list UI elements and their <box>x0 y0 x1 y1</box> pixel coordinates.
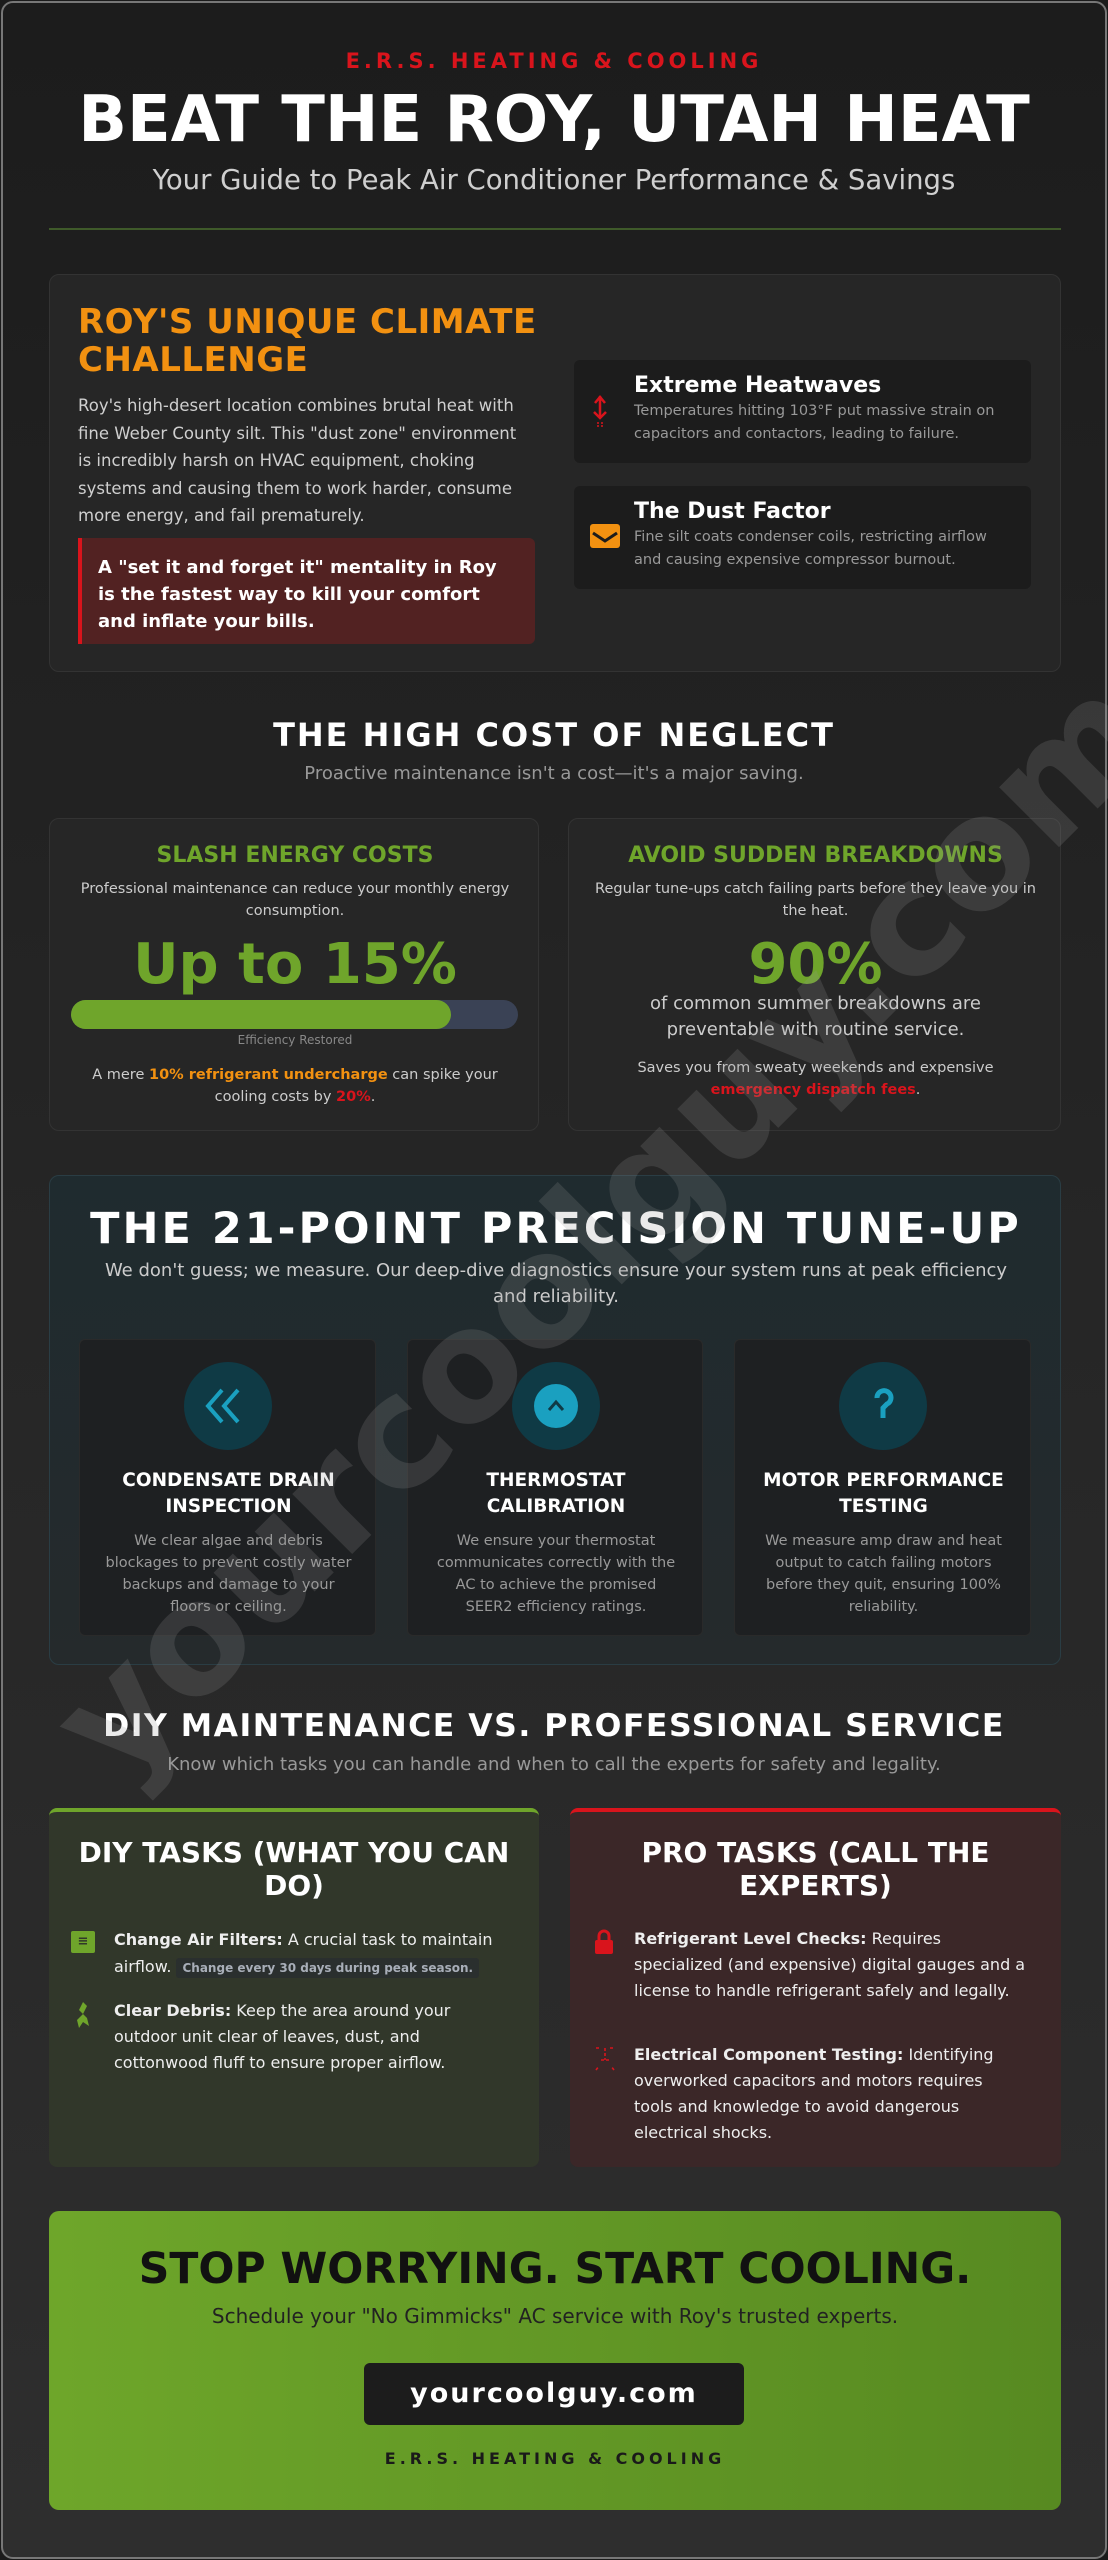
cta subtitle: Schedule your "No Gimmicks" AC service with Roy's trusted experts. <box>212 2304 898 2328</box>
pro item: electrical: Electrical Component Testing: Identifying overworked capacitors and motors requires tools and knowledge to avoid dangerous electrical shocks. <box>634 2045 994 2142</box>
icon: gauge <box>512 1362 600 1450</box>
brand label: E.R.S. HEATING & COOLING <box>346 49 762 73</box>
heading: diy vs pro: DIY MAINTENANCE VS. PROFESSIONAL SERVICE <box>103 1708 1005 1744</box>
panel: breakdowns <box>568 818 1061 1131</box>
energy description: Professional maintenance can reduce your monthly energy consumption. <box>81 881 509 919</box>
diy item: debris: Clear Debris: Keep the area around your outdoor unit clear of leaves, dust, and cottonwood fluff to ensure proper airflow. <box>114 2001 450 2072</box>
pro title: PRO TASKS (CALL THE EXPERTS) <box>641 1836 990 1902</box>
motor text <box>763 1470 1004 1615</box>
icon: fan <box>77 2002 89 2028</box>
card: condensate drain <box>79 1339 376 1636</box>
breakdowns note: Saves you from sweaty weekends and expensive emergency dispatch fees. <box>637 1060 994 1098</box>
bar label: Efficiency Restored <box>238 1033 352 1047</box>
callout <box>78 538 535 644</box>
thermostat text: THERMOSTAT CALIBRATION <box>486 1470 626 1517</box>
title: BEAT THE ROY, UTAH HEAT <box>78 83 1030 157</box>
cta button: yourcoolguy.com <box>410 2378 698 2409</box>
icon: filter <box>71 1931 95 1953</box>
subtitle: Your Guide to Peak Air Conditioner Performance & Savings <box>153 164 955 196</box>
motor text: MOTOR PERFORMANCE TESTING <box>763 1470 1004 1517</box>
energy note: A mere 10% refrigerant undercharge can spike your cooling costs by 20%. <box>92 1067 498 1105</box>
diy title: DIY TASKS (WHAT YOU CAN DO) <box>79 1836 509 1902</box>
heatwaves text <box>634 373 994 442</box>
tune-up title: THE 21-POINT PRECISION TUNE-UP <box>90 1204 1022 1254</box>
callout: A "set it and forget it" mentality in Roy is the fastest way to kill your comfort and inflate your bills. <box>98 557 497 632</box>
icon: electrical <box>596 2047 614 2070</box>
icon: thermometer <box>593 395 607 427</box>
progress bar <box>71 1000 518 1029</box>
condensate text: CONDENSATE DRAIN INSPECTION <box>122 1470 335 1517</box>
panel: energy costs <box>49 818 539 1131</box>
breakdowns title: AVOID SUDDEN BREAKDOWNS <box>628 843 1003 868</box>
breakdowns description: Regular tune-ups catch failing parts before they leave you in the heat. <box>595 881 1036 919</box>
climate heading: ROY'S UNIQUE CLIMATE CHALLENGE <box>78 302 537 380</box>
condensate text <box>106 1470 352 1615</box>
heading: cost of neglect: THE HIGH COST OF NEGLECT <box>273 716 835 754</box>
pro item: refrigerant: Refrigerant Level Checks: Requires specialized (and expensive) digital gauges and a license to handle refrigerant safely and legally. <box>634 1929 1025 2000</box>
motor text: We measure amp draw and heat output to catch failing motors before they quit, ensuring 100% reliability. <box>765 1533 1002 1615</box>
icon: filter: ≡ <box>78 1934 88 1949</box>
stat: up to 15%: Up to 15% <box>133 932 457 997</box>
icon: envelope <box>590 524 620 548</box>
stat caption: of common summer breakdowns are preventable with routine service. <box>650 993 981 1040</box>
condensate text: We clear algae and debris blockages to prevent costly water backups and damage to your floors or ceiling. <box>106 1533 351 1615</box>
card: thermostat <box>407 1339 703 1636</box>
cta title: STOP WORRYING. START COOLING. <box>139 2245 971 2294</box>
panel: 21-point tune-up <box>49 1175 1061 1665</box>
icon: motor <box>839 1362 927 1450</box>
energy title: SLASH ENERGY COSTS <box>157 843 433 868</box>
tune-up subtitle: We don't guess; we measure. Our deep-dive diagnostics ensure your system runs at peak efficiency and reliability. <box>105 1260 1007 1307</box>
icon: lock <box>595 1930 613 1954</box>
card: motor performance <box>734 1339 1031 1636</box>
panel: call to action <box>49 2211 1061 2510</box>
panel: pro tasks <box>570 1808 1061 2167</box>
subheading: diy vs pro: Know which tasks you can handle and when to call the experts for safety and legality. <box>167 1754 941 1775</box>
heatwaves text: Temperatures hitting 103°F put massive strain on capacitors and contactors, leading to failure. <box>634 403 994 442</box>
subheading: cost: Proactive maintenance isn't a cost—it's a major saving. <box>304 763 804 784</box>
dust text <box>634 499 987 568</box>
thermostat text: We ensure your thermostat communicates correctly with the AC to achieve the promised SEER2 efficiency ratings. <box>437 1533 675 1615</box>
dust text: The Dust Factor <box>634 499 831 524</box>
icon: chevrons <box>184 1362 272 1450</box>
cta footer brand: E.R.S. HEATING & COOLING <box>385 2449 725 2468</box>
card: dust factor <box>574 486 1031 589</box>
card: extreme heatwaves <box>574 360 1031 463</box>
climate paragraph: Roy's high-desert location combines brutal heat with fine Weber County silt. This "dust zone" environment is incredibly harsh on HVAC equipment, choking systems and causing them to work harder, consume more energy, and fail prematurely. <box>78 396 516 525</box>
panel: climate challenge <box>49 274 1061 672</box>
cta button <box>364 2363 744 2425</box>
diy item: filters: Change Air Filters: A crucial task to maintain airflow. Change every 30 days during peak season. <box>114 1930 492 1976</box>
dust text: Fine silt coats condenser coils, restricting airflow and causing expensive compressor burnout. <box>634 529 987 568</box>
stat: 90%: 90% <box>748 932 883 997</box>
thermostat text <box>437 1470 675 1615</box>
panel: diy tasks <box>49 1808 539 2167</box>
heatwaves text: Extreme Heatwaves <box>634 373 881 398</box>
